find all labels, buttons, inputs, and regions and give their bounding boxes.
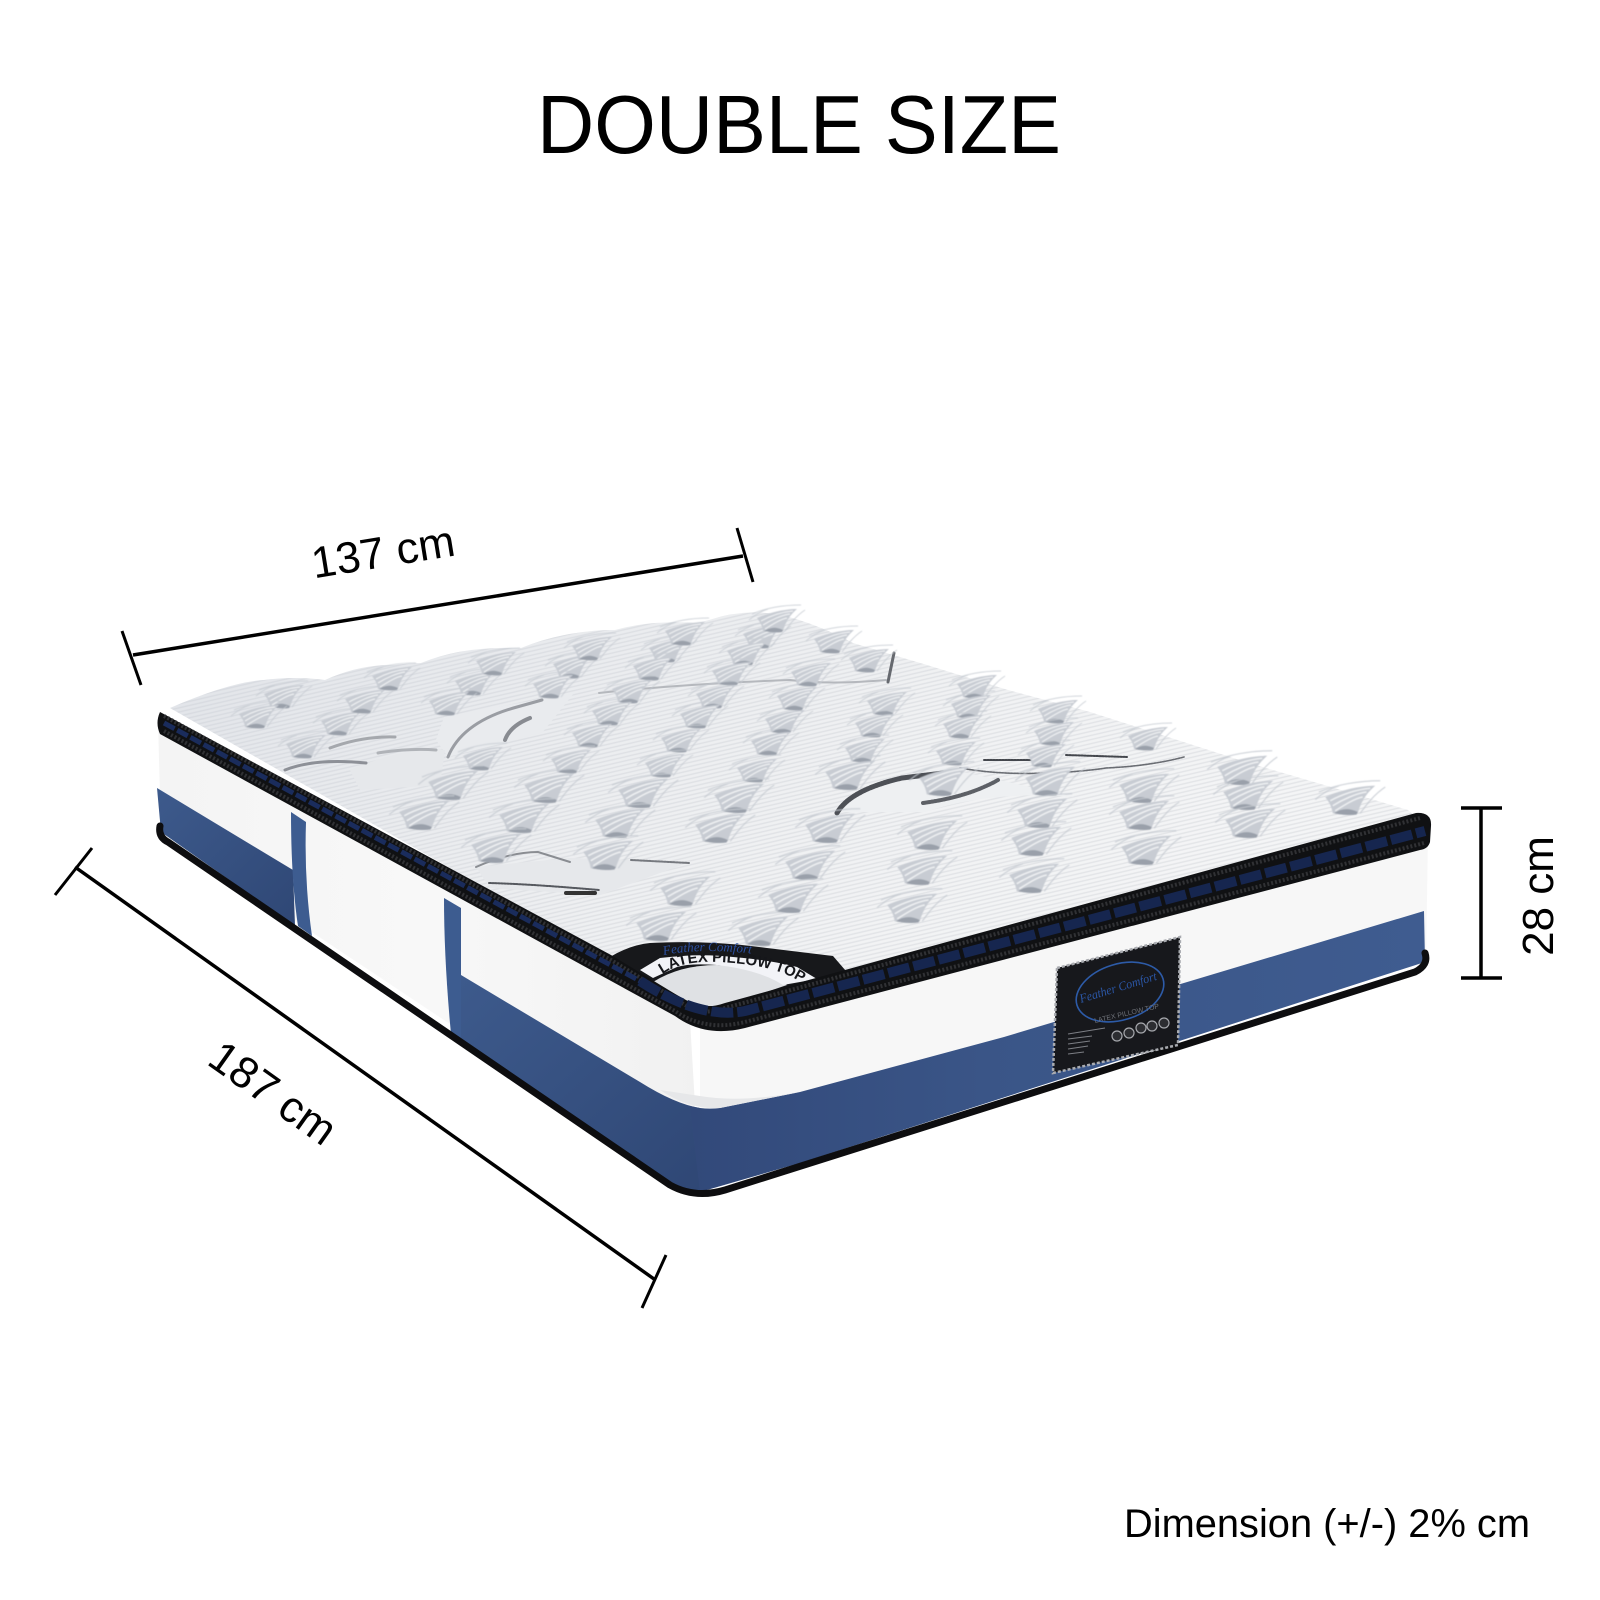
sewn brand tag [1053, 937, 1180, 1073]
fabric waves [285, 653, 1184, 895]
dimension: length 187 cm: 187 cm [200, 1032, 346, 1155]
dimension: width 137 cm [122, 517, 753, 685]
tag product name: LATEX PILLOW TOP [1094, 1003, 1160, 1025]
pillow top piping [158, 712, 1431, 1031]
side strap 2 [444, 898, 461, 1041]
title: DOUBLE SIZE [537, 78, 1061, 171]
tag script brand: Feather Comfort [1077, 969, 1159, 1006]
tufts [231, 605, 1385, 946]
dimension: height 28 cm [1461, 808, 1563, 978]
quilted top surface [170, 605, 1422, 1012]
right side face [660, 835, 1428, 1192]
tolerance note: Dimension (+/-) 2% cm [1124, 1502, 1530, 1546]
left side face [157, 722, 700, 1195]
side strap 1 [291, 812, 312, 936]
dimension: width 137 cm: 137 cm [308, 517, 458, 588]
corner label: latex pillow top: LATEX PILLOW TOP [658, 955, 806, 980]
dimension: height 28 cm: 28 cm [1514, 836, 1563, 956]
corner label: latex pillow top: Feather Comfort [663, 942, 752, 956]
bottom cord [160, 826, 1426, 1194]
tag logo oval [1069, 952, 1171, 1032]
mattress illustration [156, 604, 1432, 1197]
dimension: length 187 cm [55, 848, 666, 1308]
corner label: latex pillow top [612, 942, 845, 1006]
tag care icons [1112, 1018, 1169, 1041]
